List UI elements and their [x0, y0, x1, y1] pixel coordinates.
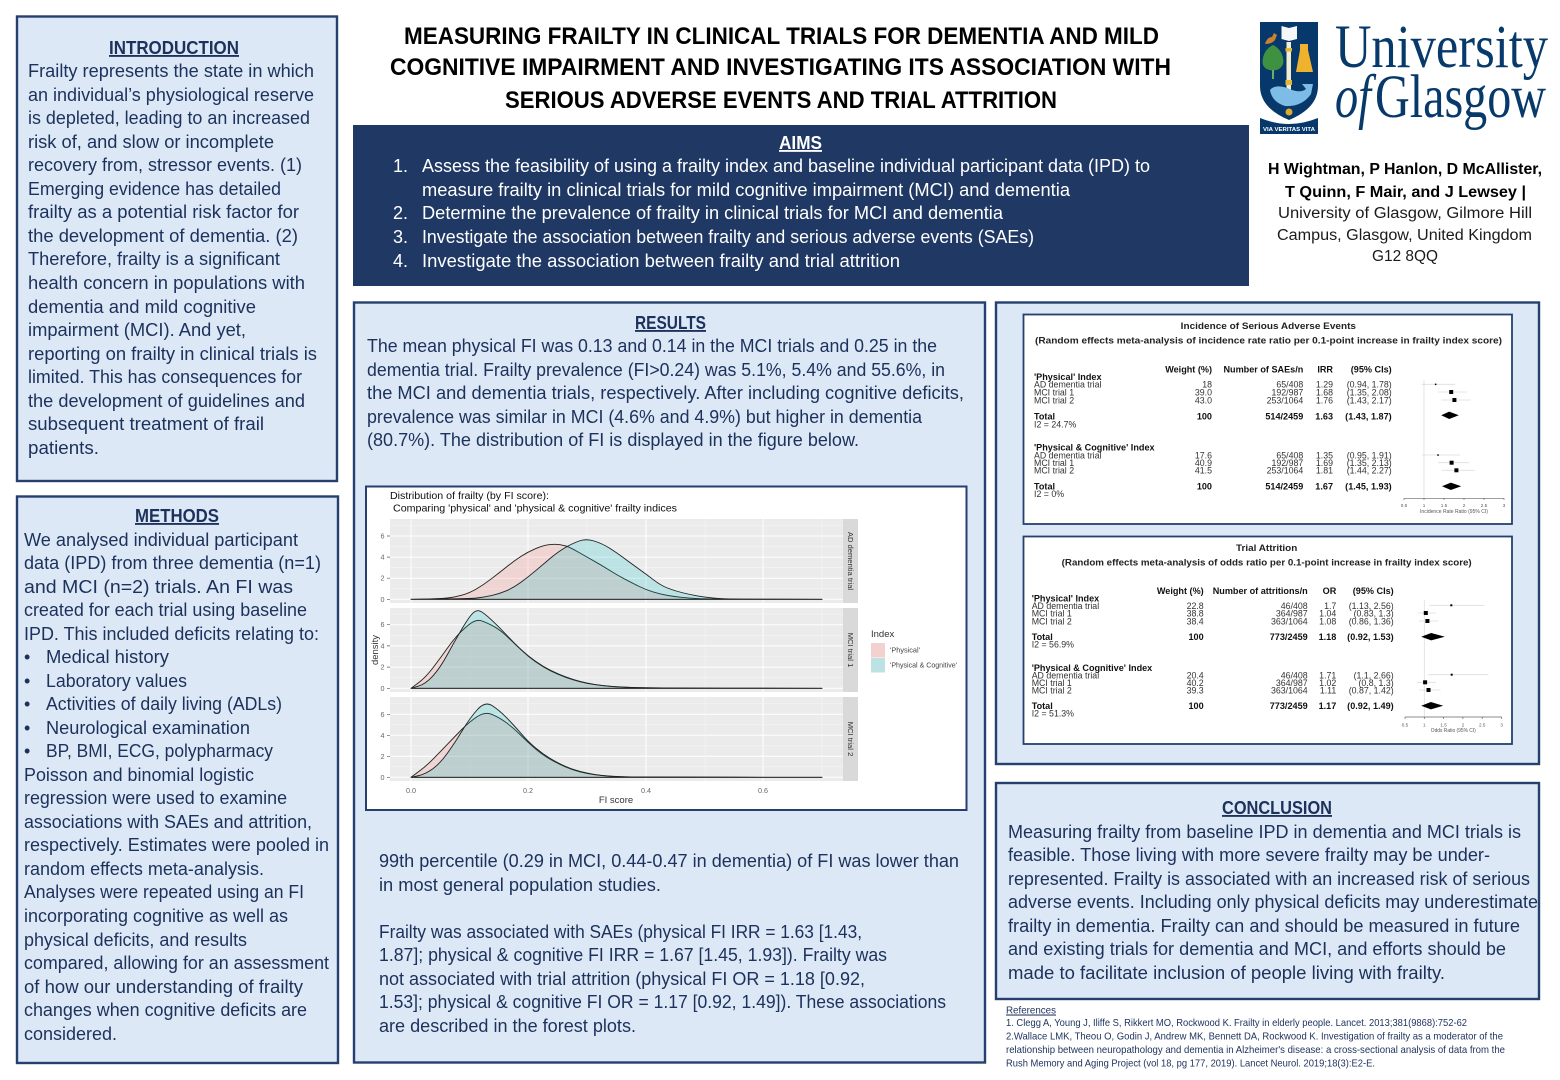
- table rows: physical index: 364/987: [1276, 609, 1308, 619]
- table header: Number of attritions/n: [1213, 586, 1308, 596]
- chart title: Comparing 'physical' and 'physical & cognitive' frailty indices: [393, 504, 677, 514]
- table rows: physical and cognitive index: 17.6: [1195, 450, 1212, 460]
- table rows: physical index: 1.29: [1316, 380, 1333, 390]
- text block: methods body: physical deficits, and results: [24, 930, 247, 950]
- table rows: physical and cognitive index: 253/1064: [1267, 466, 1303, 476]
- table rows: physical index: (1.13, 2.56): [1349, 601, 1394, 611]
- density curves: MCI trial 2: [411, 704, 822, 777]
- text block: references: 1. Clegg A, Young J, Iliffe S, Rikkert MO, Rockwood K. Frailty in elderly people. Lancet. 2013;381(9868):752-62: [1006, 1017, 1467, 1029]
- list: aims: 4.: [393, 251, 408, 271]
- list: aims: Assess the feasibility of using a frailty index and baseline individual participant data (IPD) to: [422, 156, 1150, 176]
- text block: conclusion body: represented. Frailty is associated with an increased risk of serious: [1008, 869, 1530, 889]
- table rows: physical and cognitive index: (1.35, 2.13): [1347, 458, 1392, 468]
- facet strips: [843, 519, 858, 781]
- wordmark: [1335, 14, 1548, 131]
- panel: forest plots: [996, 302, 1539, 764]
- table rows: physical index: (1.43, 1.87): [1345, 411, 1392, 421]
- text block: conclusion body: Measuring frailty from baseline IPD in dementia and MCI trials is: [1008, 822, 1521, 842]
- icon: crest shield: [1260, 22, 1318, 120]
- legend: [871, 629, 958, 672]
- chart title: [390, 491, 677, 514]
- table rows: physical and cognitive index: (1.44, 2.27): [1347, 466, 1392, 476]
- list: aims: [393, 156, 1150, 271]
- text block: methods body: •: [24, 741, 30, 761]
- y axis labels: 4: [380, 731, 384, 740]
- table rows: physical index: 38.8: [1187, 609, 1204, 619]
- table rows: physical and cognitive index: [1034, 443, 1392, 499]
- text block: results intro: the MCI and dementia trials, respectively. After including cognitive deficits,: [367, 383, 964, 403]
- list: aims: 3.: [393, 227, 408, 247]
- legend: Index: [871, 629, 894, 640]
- text block: methods body: respectively. Estimates were pooled in: [24, 835, 329, 855]
- text block: results percentile and associations: are described in the forest plots.: [379, 1016, 636, 1036]
- chart title: Distribution of frailty (by FI score):: [390, 491, 549, 502]
- plot axis: 0.5: [1401, 503, 1408, 508]
- table rows: physical index: 100: [1189, 632, 1204, 642]
- x axis labels: 0.4: [641, 786, 651, 795]
- table header: Weight (%): [1157, 586, 1204, 596]
- table rows: physical index: (0.83, 1.3): [1354, 609, 1394, 619]
- table rows: physical and cognitive index: 39.3: [1187, 686, 1204, 696]
- facet strips: AD dementia trial: [846, 532, 855, 590]
- list: aims: measure frailty in clinical trials for mild cognitive impairment (MCI) and dementia: [422, 180, 1071, 200]
- text block: conclusion body: frailty in dementia. Frailty can and should be measured in future: [1008, 916, 1520, 936]
- table rows: physical index: 43.0: [1195, 395, 1212, 405]
- forest plot: trial attrition: (Random effects meta-analysis of odds ratio per 0.1-point increase in frailty index score): [1062, 557, 1472, 567]
- table rows: physical index: 'Physical' Index: [1032, 593, 1099, 603]
- text block: results percentile and associations: in most general population studies.: [379, 875, 661, 895]
- text block: methods body: •: [24, 718, 30, 738]
- list: aims: Investigate the association between frailty and trial attrition: [422, 251, 900, 271]
- table rows: physical and cognitive index: 1.02: [1319, 678, 1336, 688]
- text block: introduction body: [28, 61, 317, 458]
- heading: methods: METHODS: [135, 505, 219, 526]
- text block: authors and affiliation: [1268, 161, 1542, 265]
- text block: references: References: [1006, 1004, 1056, 1016]
- table rows: physical index: (0.92, 1.53): [1347, 632, 1394, 642]
- y axis labels: 0: [380, 595, 384, 604]
- title: [390, 23, 1171, 114]
- forest plot: incidence of serious adverse events: (Random effects meta-analysis of incidence rate ratio per 0.1-point increase in frailty index score): [1035, 335, 1502, 345]
- table rows: physical and cognitive index: [1032, 663, 1394, 719]
- plot axis: 0.5: [1402, 722, 1409, 727]
- list: aims: 2.: [393, 203, 408, 223]
- text block: methods body: Analyses were repeated using an FI: [24, 882, 304, 902]
- text block: references: 2.Wallace LMK, Theou O, Godin J, Andrew MK, Bennett DA, Rockwood K. Investigation of frailty as a moderator of the: [1006, 1030, 1503, 1042]
- text block: methods body: associations with SAEs and attrition,: [24, 812, 312, 832]
- table rows: physical index: 514/2459: [1265, 411, 1303, 421]
- table rows: physical and cognitive index: 65/408: [1276, 450, 1303, 460]
- panel: methods: [17, 496, 338, 1063]
- forest plot: trial attrition: [1024, 536, 1512, 744]
- table header: (95% CIs): [1353, 586, 1394, 596]
- table rows: physical and cognitive index: (0.95, 1.91): [1347, 450, 1392, 460]
- table rows: physical and cognitive index: 364/987: [1276, 678, 1308, 688]
- table rows: physical index: (1.35, 2.08): [1347, 388, 1392, 398]
- text block: methods body: data (IPD) from three dementia (n=1): [24, 553, 321, 573]
- text block: methods body: BP, BMI, ECG, polypharmacy: [46, 741, 273, 761]
- panel: introduction: [17, 16, 337, 481]
- x axis labels: [406, 786, 768, 806]
- text block: conclusion body: adverse events. Including only physical deficits may underestimate: [1008, 892, 1538, 912]
- title: COGNITIVE IMPAIRMENT AND INVESTIGATING ITS ASSOCIATION WITH: [390, 54, 1171, 81]
- table rows: physical and cognitive index: MCI trial 1: [1034, 458, 1074, 468]
- table rows: physical and cognitive index: 1.35: [1316, 450, 1333, 460]
- text block: authors and affiliation: G12 8QQ: [1372, 248, 1438, 265]
- text block: methods body: compared, allowing for an assessment: [24, 953, 329, 973]
- heading: results: RESULTS: [635, 312, 706, 333]
- facet strips: MCI trial 2: [846, 722, 855, 756]
- forest plot: incidence of serious adverse events: Incidence of Serious Adverse Events: [1181, 321, 1356, 331]
- table rows: physical and cognitive index: I2 = 51.3%: [1032, 709, 1074, 719]
- table rows: physical index: 18: [1202, 380, 1212, 390]
- x axis labels: 0.0: [406, 786, 416, 795]
- table rows: physical and cognitive index: 514/2459: [1265, 481, 1303, 491]
- plot axis: 2: [1463, 503, 1466, 508]
- ribbon: motto: [1260, 118, 1318, 134]
- table rows: physical index: 192/987: [1271, 388, 1303, 398]
- table rows: physical index: I2 = 24.7%: [1034, 419, 1076, 429]
- table rows: physical index: [1032, 593, 1394, 650]
- text block: introduction body: patients.: [28, 438, 99, 458]
- text block: methods body: •: [24, 647, 30, 667]
- y axis labels: [370, 532, 390, 782]
- table rows: physical and cognitive index: 1.81: [1316, 466, 1333, 476]
- y axis labels: 6: [380, 532, 384, 540]
- heading: aims: AIMS: [779, 132, 822, 153]
- text block: methods body: •: [24, 694, 30, 714]
- table rows: physical index: AD dementia trial: [1032, 601, 1099, 611]
- text block: methods body: Poisson and binomial logistic: [24, 765, 254, 785]
- table rows: physical index: 1.18: [1319, 632, 1336, 642]
- text block: methods body: random effects meta-analysis.: [24, 859, 264, 879]
- text block: methods body: changes when cognitive deficits are: [24, 1000, 307, 1020]
- table rows: physical and cognitive index: (1.45, 1.93): [1345, 481, 1392, 491]
- table rows: physical index: [1034, 372, 1392, 429]
- table rows: physical index: Total: [1034, 411, 1055, 421]
- text block: results percentile and associations: Frailty was associated with SAEs (physical FI IRR = 1.63 [1.43,: [379, 922, 862, 942]
- plot axis: 1: [1423, 503, 1426, 508]
- table header: OR: [1323, 586, 1337, 596]
- table rows: physical index: 65/408: [1276, 380, 1303, 390]
- text block: results percentile and associations: [379, 851, 959, 1036]
- table rows: physical index: 100: [1197, 411, 1212, 421]
- y axis labels: 6: [380, 620, 384, 629]
- panel: aims: [353, 125, 1249, 286]
- text block: introduction body: the development of dementia. (2): [28, 226, 298, 246]
- text block: results intro: prevalence was similar in MCI (4.6% and 4.9%) but higher in dementia: [367, 407, 923, 427]
- forest plot: trial attrition: Trial Attrition: [1236, 543, 1298, 553]
- title: MEASURING FRAILTY IN CLINICAL TRIALS FOR DEMENTIA AND MILD: [404, 23, 1159, 50]
- table rows: physical index: MCI trial 2: [1032, 616, 1072, 626]
- table header: [1165, 365, 1392, 375]
- panel: results: [354, 302, 985, 1062]
- y axis labels: 4: [380, 641, 384, 650]
- density curves: MCI trial 1: [411, 611, 822, 688]
- table header: Number of SAEs/n: [1223, 365, 1303, 375]
- table rows: physical and cognitive index: 192/987: [1271, 458, 1303, 468]
- table rows: physical index: AD dementia trial: [1034, 380, 1102, 390]
- list: aims: Determine the prevalence of frailty in clinical trials for MCI and dementia: [422, 203, 1004, 223]
- table rows: physical and cognitive index: 41.5: [1195, 466, 1212, 476]
- text block: authors and affiliation: H Wightman, P Hanlon, D McAllister,: [1268, 161, 1542, 178]
- table rows: physical index: 'Physical' Index: [1034, 372, 1102, 382]
- table rows: physical and cognitive index: 1.69: [1316, 458, 1333, 468]
- x axis labels: FI score: [599, 795, 633, 806]
- y axis labels: density: [370, 635, 381, 665]
- table rows: physical index: 1.76: [1316, 395, 1333, 405]
- text block: methods body: considered.: [24, 1024, 117, 1044]
- text block: conclusion body: and existing trials for dementia and MCI, and efforts should be: [1008, 939, 1506, 959]
- density curves: AD dementia trial: [411, 540, 822, 599]
- text block: results intro: [367, 336, 964, 450]
- ribbon: motto: VIA VERITAS VITA: [1263, 127, 1316, 133]
- y axis labels: 2: [380, 663, 384, 672]
- table rows: physical and cognitive index: 1.17: [1319, 701, 1336, 711]
- table rows: physical and cognitive index: 1.67: [1315, 481, 1333, 491]
- plot axis: Odds Ratio (95% CI): [1431, 728, 1476, 734]
- table rows: physical index: 1.68: [1316, 388, 1333, 398]
- text block: methods body: Medical history: [46, 647, 169, 667]
- table header: (95% CIs): [1351, 365, 1392, 375]
- table rows: physical and cognitive index: 1.71: [1319, 671, 1336, 681]
- text block: methods body: incorporating cognitive as well as: [24, 906, 288, 926]
- table rows: physical and cognitive index: 46/408: [1281, 671, 1308, 681]
- text block: methods body: [24, 530, 329, 1044]
- text block: references: relationship between neuropathology and dementia in Alzheimer's disease: a cross-sectional analysis of data from the: [1006, 1044, 1505, 1056]
- table rows: physical index: 1.08: [1319, 616, 1336, 626]
- table rows: physical index: 773/2459: [1270, 632, 1308, 642]
- legend: 'Physical': [890, 646, 921, 654]
- text block: results percentile and associations: 99th percentile (0.29 in MCI, 0.44-0.47 in dementia) of FI was lower than: [379, 851, 959, 871]
- table header: [1157, 586, 1394, 596]
- panel backgrounds and grid: [390, 519, 843, 781]
- table rows: physical and cognitive index: Total: [1032, 701, 1053, 711]
- table rows: physical index: 1.04: [1319, 609, 1336, 619]
- table rows: physical and cognitive index: 40.9: [1195, 458, 1212, 468]
- table rows: physical and cognitive index: AD dementia trial: [1034, 450, 1102, 460]
- text block: methods body: Neurological examination: [46, 718, 250, 738]
- text block: introduction body: risk of, and slow or incomplete: [28, 132, 274, 152]
- text block: conclusion body: made to facilitate inclusion of people living with frailty.: [1008, 963, 1445, 983]
- table rows: physical index: (1.43, 2.17): [1347, 395, 1392, 405]
- text block: introduction body: is depleted, leading to an increased: [28, 108, 310, 128]
- text block: introduction body: Emerging evidence has detailed: [28, 179, 281, 199]
- text block: introduction body: an individual’s physiological reserve: [28, 85, 314, 105]
- table rows: physical index: 1.7: [1324, 601, 1336, 611]
- table rows: physical and cognitive index: 773/2459: [1270, 701, 1308, 711]
- plot axis: 1.5: [1440, 722, 1447, 727]
- heading: introduction: INTRODUCTION: [109, 37, 239, 58]
- table rows: physical and cognitive index: 363/1064: [1271, 686, 1308, 696]
- text block: results percentile and associations: 1.53]; physical & cognitive FI OR = 1.17 [0.92, 1.49]). These associations: [379, 992, 946, 1012]
- table rows: physical index: 1.63: [1315, 411, 1333, 421]
- table rows: physical index: I2 = 56.9%: [1032, 640, 1074, 650]
- text block: methods body: regression were used to examine: [24, 788, 287, 808]
- table rows: physical index: 253/1064: [1267, 395, 1303, 405]
- table rows: physical and cognitive index: AD dementia trial: [1032, 671, 1099, 681]
- text block: conclusion body: [1008, 822, 1538, 983]
- text block: methods body: We analysed individual participant: [24, 530, 298, 550]
- table rows: physical and cognitive index: 100: [1189, 701, 1204, 711]
- table rows: physical index: (0.94, 1.78): [1347, 380, 1392, 390]
- plot axis: 3: [1500, 722, 1503, 727]
- plot axis: 1: [1423, 722, 1426, 727]
- text block: authors and affiliation: University of Glasgow, Gilmore Hill: [1278, 205, 1532, 222]
- text block: introduction body: recovery from, stressor events. (1): [28, 155, 302, 175]
- text block: methods body: Laboratory values: [46, 671, 187, 691]
- text block: results percentile and associations: not associated with trial attrition (physical FI OR = 1.18 [0.92,: [379, 969, 865, 989]
- table rows: physical index: 22.8: [1187, 601, 1204, 611]
- plot axis: 2: [1462, 722, 1465, 727]
- plot axis: 1.5: [1441, 503, 1448, 508]
- text block: references: Rush Memory and Aging Project (vol 18, pg 177, 2019). Lancet Neurol. 2019;18(3):E2-E.: [1006, 1058, 1375, 1070]
- legend: 'Physical & Cognitive': [890, 660, 958, 670]
- list: aims: 1.: [393, 156, 408, 176]
- table rows: physical and cognitive index: MCI trial 1: [1032, 678, 1072, 688]
- logo: University of Glasgow: [1260, 14, 1548, 134]
- table rows: physical and cognitive index: 'Physical & Cognitive' Index: [1034, 443, 1155, 453]
- y axis labels: 0: [380, 684, 384, 693]
- plot axis: 2.5: [1481, 503, 1488, 508]
- text block: authors and affiliation: Campus, Glasgow, United Kingdom: [1277, 227, 1532, 244]
- table rows: physical index: 46/408: [1281, 601, 1308, 611]
- table rows: physical index: MCI trial 1: [1032, 609, 1072, 619]
- table rows: physical and cognitive index: 40.2: [1187, 678, 1204, 688]
- table rows: physical and cognitive index: (1.1, 2.66): [1354, 671, 1394, 681]
- table rows: physical index: (0.86, 1.36): [1349, 616, 1394, 626]
- x axis labels: 0.2: [523, 786, 533, 795]
- text block: conclusion body: feasible. Those living with more severe frailty may be under-: [1008, 845, 1490, 865]
- table rows: physical and cognitive index: (0.87, 1.42): [1349, 686, 1394, 696]
- table rows: physical and cognitive index: 1.11: [1320, 686, 1336, 696]
- list: aims: Investigate the association between frailty and serious adverse events (SAEs): [422, 227, 1034, 247]
- table rows: physical and cognitive index: MCI trial 2: [1032, 686, 1072, 696]
- table rows: physical and cognitive index: MCI trial 2: [1034, 466, 1074, 476]
- y axis labels: 2: [380, 752, 384, 761]
- text block: results intro: The mean physical FI was 0.13 and 0.14 in the MCI trials and 0.25 in the: [367, 336, 937, 356]
- plot axis: Incidence Rate Ratio (95% CI): [1420, 509, 1488, 515]
- table rows: physical and cognitive index: 20.4: [1187, 671, 1204, 681]
- y axis labels: 6: [380, 710, 384, 719]
- x axis labels: 0.6: [758, 786, 768, 795]
- text block: introduction body: subsequent treatment of frail: [28, 414, 264, 434]
- table rows: physical index: MCI trial 1: [1034, 388, 1074, 398]
- table rows: physical index: 39.0: [1195, 388, 1212, 398]
- y axis labels: 2: [380, 574, 384, 583]
- plot marks: [1422, 380, 1475, 498]
- text block: introduction body: frailty as a potential risk factor for: [28, 202, 299, 222]
- text block: introduction body: health concern in populations with: [28, 273, 305, 293]
- text block: results percentile and associations: 1.87]; physical & cognitive FI IRR = 1.67 [1.45, 1.93]). Frailty was: [379, 945, 887, 965]
- text block: methods body: of how our understanding of frailty: [24, 977, 303, 997]
- plot axis: [1402, 717, 1503, 734]
- text block: introduction body: impairment (MCI). And yet,: [28, 320, 246, 340]
- plot axis: 2.5: [1479, 722, 1486, 727]
- text block: introduction body: limited. This has consequences for: [28, 367, 302, 387]
- table rows: physical index: 363/1064: [1271, 616, 1308, 626]
- chart: distribution of frailty: [366, 486, 966, 810]
- text block: methods body: •: [24, 671, 30, 691]
- text block: introduction body: the development of guidelines and: [28, 391, 305, 411]
- table rows: physical and cognitive index: (0.92, 1.49): [1347, 701, 1394, 711]
- table rows: physical index: MCI trial 2: [1034, 395, 1074, 405]
- table rows: physical index: Total: [1032, 632, 1053, 642]
- plot axis: [1401, 498, 1506, 515]
- table rows: physical and cognitive index: (0.8, 1.3): [1358, 678, 1394, 688]
- table rows: physical and cognitive index: I2 = 0%: [1034, 489, 1064, 499]
- panel: conclusion: [996, 783, 1539, 999]
- table rows: physical and cognitive index: 'Physical & Cognitive' Index: [1032, 663, 1152, 673]
- forest plot: incidence of serious adverse events: [1024, 314, 1512, 524]
- text block: introduction body: dementia and mild cognitive: [28, 297, 256, 317]
- text block: methods body: IPD. This included deficits relating to:: [24, 624, 319, 644]
- facet strips: MCI trial 1: [846, 633, 855, 667]
- y axis labels: 4: [380, 553, 384, 562]
- y axis labels: 0: [380, 773, 384, 782]
- wordmark: of: [1335, 64, 1376, 131]
- table rows: physical and cognitive index: Total: [1034, 481, 1055, 491]
- table rows: physical index: 38.4: [1187, 616, 1204, 626]
- text block: methods body: and MCI (n=2) trials. An FI was: [24, 577, 293, 597]
- text block: introduction body: Frailty represents the state in which: [28, 61, 314, 81]
- plot axis: 3: [1503, 503, 1506, 508]
- heading: conclusion: CONCLUSION: [1222, 797, 1332, 818]
- title: SERIOUS ADVERSE EVENTS AND TRIAL ATTRITION: [505, 87, 1057, 114]
- text block: methods body: created for each trial using baseline: [24, 600, 307, 620]
- text block: results intro: dementia trial. Frailty prevalence (FI>0.24) was 5.1%, 5.4% and 55.6%, in: [367, 360, 945, 380]
- table header: IRR: [1317, 365, 1333, 375]
- text block: authors and affiliation: T Quinn, F Mair, and J Lewsey |: [1285, 184, 1526, 201]
- text block: results intro: (80.7%). The distribution of FI is displayed in the figure below.: [367, 430, 859, 450]
- text block: references: [1006, 1004, 1505, 1070]
- text block: introduction body: reporting on frailty in clinical trials is: [28, 344, 317, 364]
- plot marks: [1417, 600, 1488, 717]
- text block: introduction body: Therefore, frailty is a significant: [28, 249, 280, 269]
- table header: Weight (%): [1165, 365, 1212, 375]
- table rows: physical and cognitive index: 100: [1197, 481, 1212, 491]
- text block: methods body: Activities of daily living (ADLs): [46, 694, 282, 714]
